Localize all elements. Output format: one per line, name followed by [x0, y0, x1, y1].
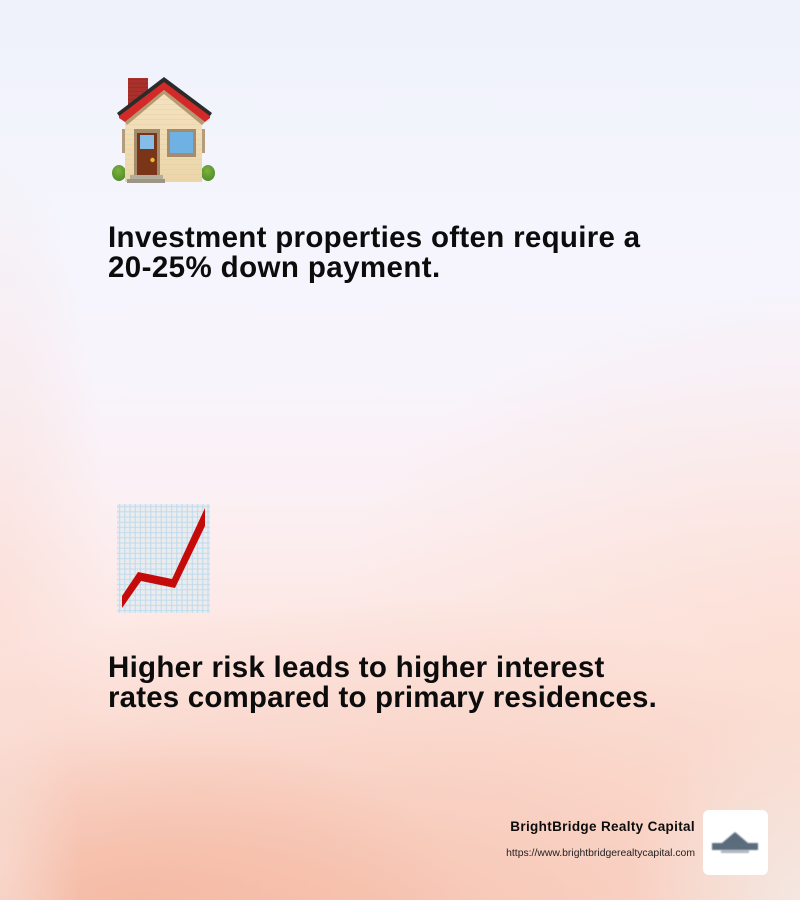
- logo mark: [711, 831, 759, 854]
- heading: down payment: 20-25% down payment.: [108, 251, 441, 284]
- heading: interest rates: [108, 651, 657, 714]
- icon: rising chart: [117, 504, 210, 613]
- heading: down payment: [108, 221, 640, 284]
- heading: interest rates: Higher risk leads to higher interest: [108, 651, 605, 684]
- heading: down payment: Investment properties often require a: [108, 221, 640, 254]
- heading: interest rates: rates compared to primary residences.: [108, 681, 657, 714]
- icon: house: [112, 77, 215, 183]
- logo card: [703, 810, 768, 875]
- footer brand name: BrightBridge Realty Capital: [510, 819, 695, 834]
- footer url: https://www.brightbridgerealtycapital.com: [506, 848, 695, 859]
